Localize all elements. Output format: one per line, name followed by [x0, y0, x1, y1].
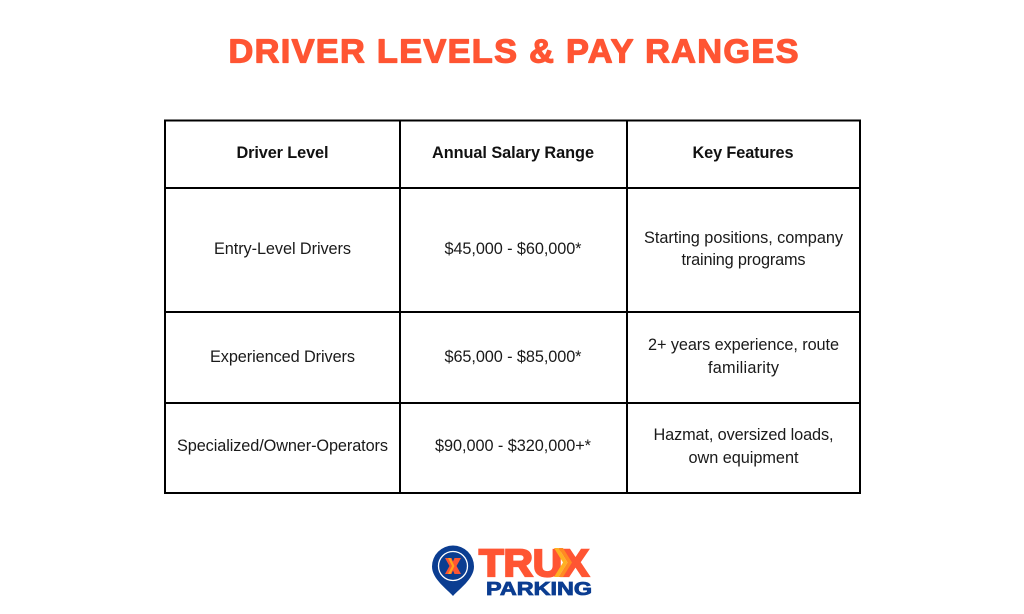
row: entry-level drivers: [214, 229, 844, 269]
row: specialized/owner-operators: own equipment: [688, 449, 799, 467]
row: specialized/owner-operators: Specialized/Owner-Operators: [177, 437, 388, 455]
row: specialized/owner-operators: [177, 426, 834, 467]
row: experienced drivers: familiarity: [708, 359, 780, 377]
row: experienced drivers: $65,000 - $85,000*: [444, 348, 582, 366]
icon: location pin: [432, 546, 474, 596]
row: entry-level drivers: $45,000 - $60,000*: [444, 240, 582, 258]
table header row: [236, 144, 794, 162]
table: [165, 120, 860, 493]
row: experienced drivers: 2+ years experience, route: [648, 336, 839, 354]
title: DRIVER LEVELS & PAY RANGES: [229, 34, 798, 71]
row: experienced drivers: [210, 336, 839, 377]
logo: Trux Parking: [432, 543, 592, 599]
table header row: Annual Salary Range: [432, 144, 594, 162]
logo wordmark: TRUX: TRUX: [479, 543, 590, 585]
table header row: Driver Level: [236, 144, 328, 162]
logo wordmark: PARKING: PARKING: [486, 579, 592, 599]
row: experienced drivers: Experienced Drivers: [210, 348, 355, 366]
row: specialized/owner-operators: $90,000 - $320,000+*: [435, 437, 592, 455]
row: entry-level drivers: training programs: [682, 251, 806, 269]
row: entry-level drivers: Entry-Level Drivers: [214, 240, 351, 258]
row: entry-level drivers: Starting positions, company: [644, 229, 844, 247]
table header row: Key Features: [692, 144, 794, 162]
row: specialized/owner-operators: Hazmat, oversized loads,: [654, 426, 834, 444]
